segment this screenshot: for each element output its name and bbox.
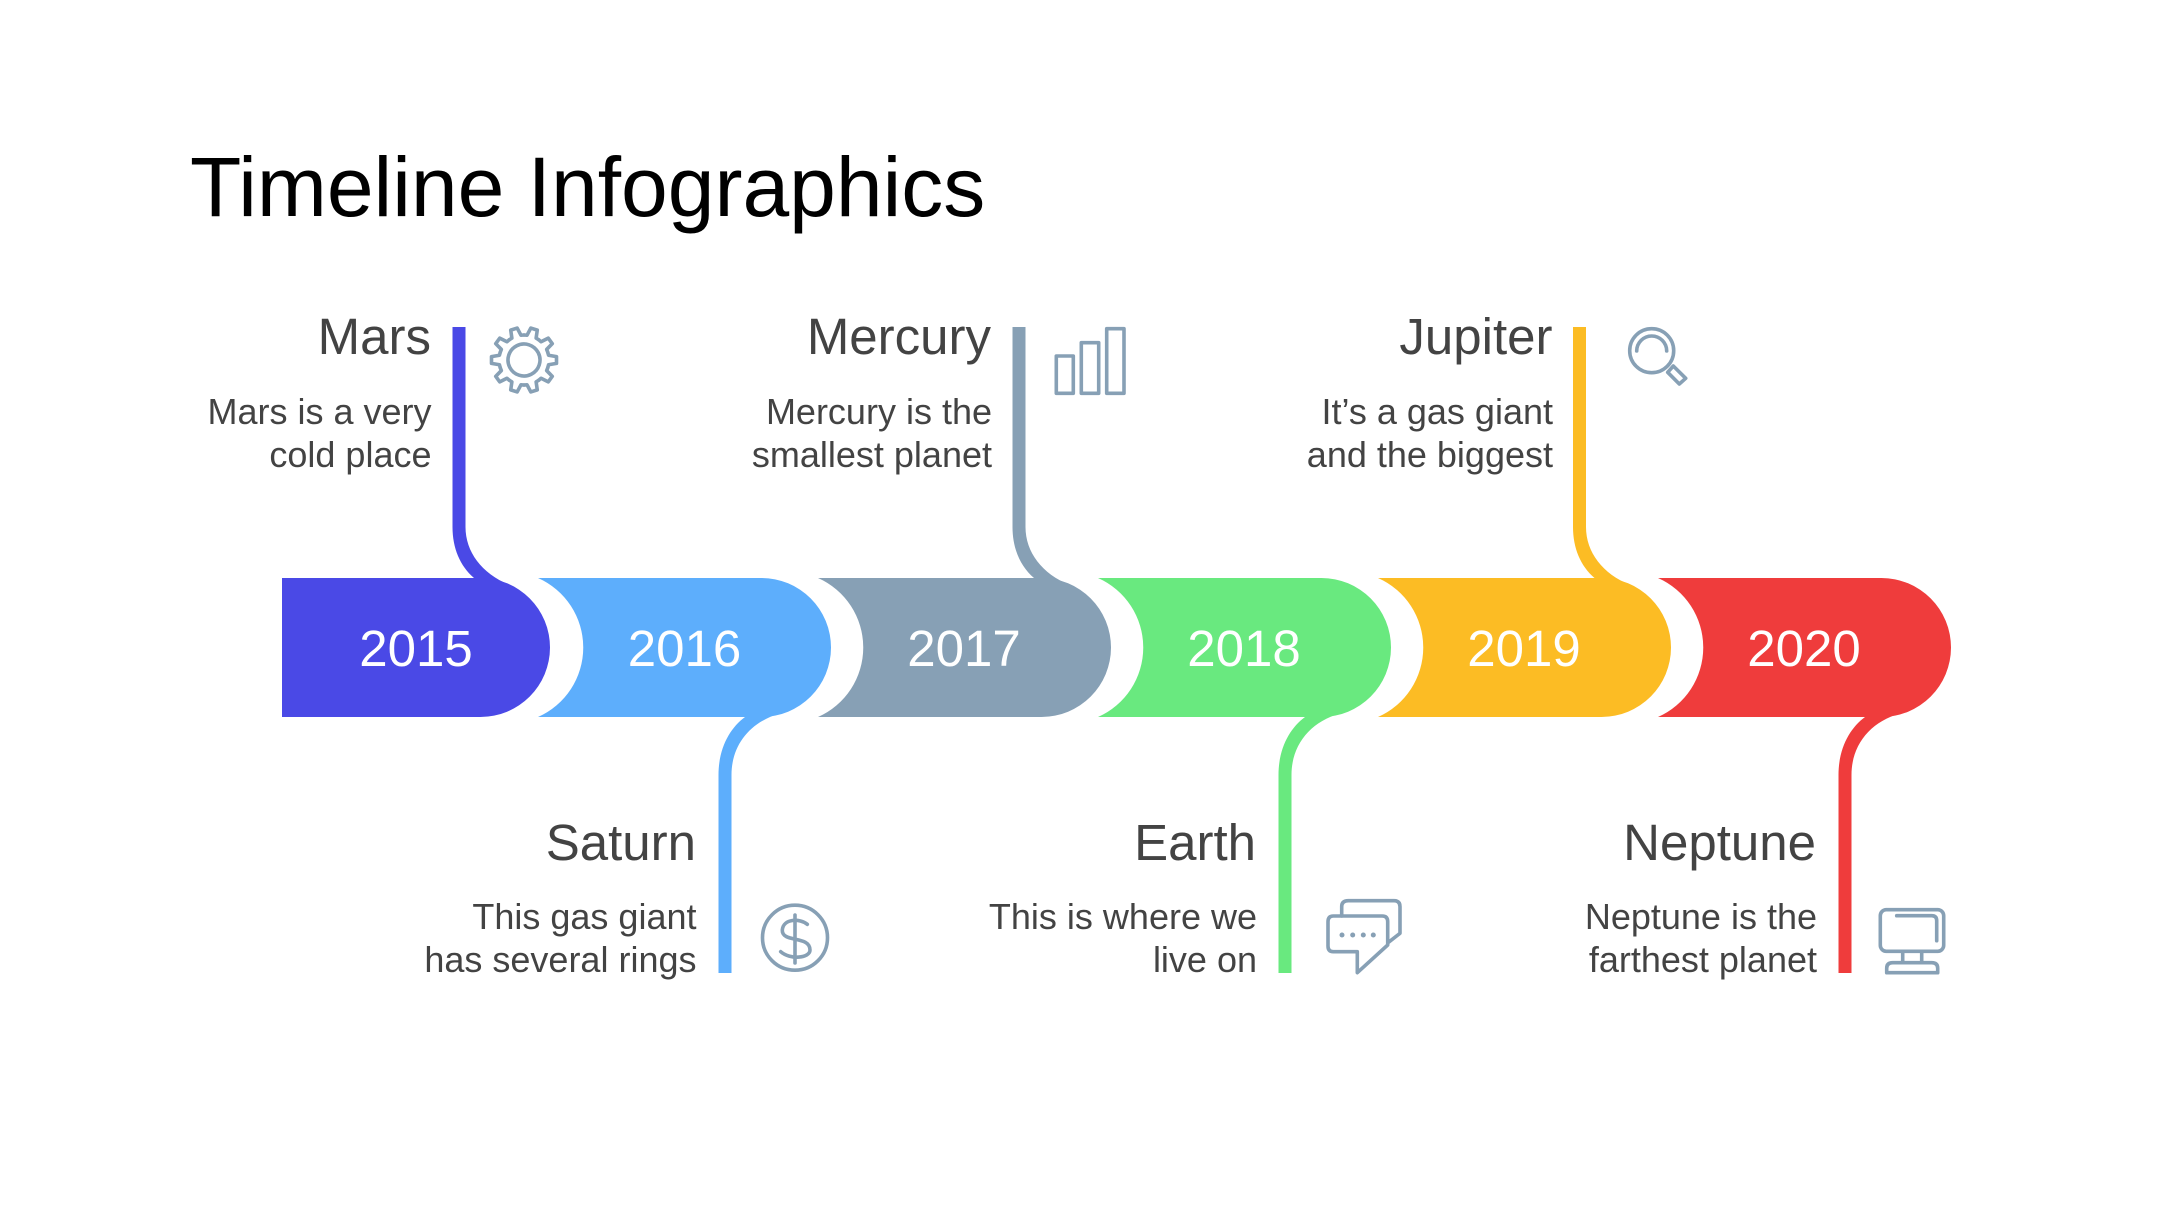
connector line: Mars xyxy=(452,327,510,590)
panel: 2020 Neptune xyxy=(1585,578,1951,980)
text: Jupiter description: It’s a gas giant xyxy=(1322,391,1553,432)
panel: 2017 Mercury xyxy=(752,308,1124,717)
timeline segment: 2019 xyxy=(1378,578,1671,717)
panel: 2016 Saturn xyxy=(424,578,831,980)
year: 2016: 2016 xyxy=(628,620,741,677)
text: Saturn description: This gas giant xyxy=(472,896,696,937)
text: Earth description: live on xyxy=(1153,939,1257,980)
icon: chat bubbles xyxy=(1328,901,1400,973)
text: Earth description: This is where we xyxy=(989,896,1257,937)
timeline segment: 2016 xyxy=(538,578,831,717)
icon: magnifying glass xyxy=(1630,329,1686,384)
heading: Jupiter: Jupiter xyxy=(1399,308,1553,365)
timeline segment: 2015 xyxy=(282,578,550,717)
icon: dollar coin xyxy=(762,905,828,970)
text: Saturn description: has several rings xyxy=(424,939,696,980)
timeline segment: 2018 xyxy=(1098,578,1391,717)
year: 2019: 2019 xyxy=(1467,620,1581,677)
heading: Saturn: Saturn xyxy=(546,814,696,871)
icon: desktop monitor xyxy=(1880,910,1944,973)
heading: Mars: Mars xyxy=(318,308,431,365)
icon: gear xyxy=(482,319,566,401)
timeline segment: 2020 xyxy=(1658,578,1951,717)
connector line: Mercury xyxy=(1012,327,1070,590)
icon: bar chart xyxy=(1056,329,1124,393)
title: Timeline Infographics xyxy=(190,140,985,234)
connector line: Earth xyxy=(1278,705,1340,973)
connector line: Jupiter xyxy=(1573,327,1630,590)
text: Neptune description: farthest planet xyxy=(1589,939,1817,980)
panel: 2018 Earth xyxy=(989,578,1400,980)
text: Mars description: Mars is a very xyxy=(207,391,432,432)
year: 2018: 2018 xyxy=(1187,620,1301,677)
connector line: Neptune xyxy=(1838,705,1900,973)
text: Mars description: cold place xyxy=(269,434,432,475)
heading: Earth: Earth xyxy=(1134,814,1256,871)
text: Jupiter description: and the biggest xyxy=(1307,434,1553,475)
panel: 2019 Jupiter xyxy=(1307,308,1686,717)
panel: 2015 Mars xyxy=(207,308,566,717)
year: 2020: 2020 xyxy=(1747,620,1861,677)
text: Mercury description: Mercury is the xyxy=(766,391,992,432)
heading: Neptune: Neptune xyxy=(1623,814,1816,871)
text: Mercury description: smallest planet xyxy=(752,434,992,475)
year: 2015: 2015 xyxy=(359,620,473,677)
timeline segment: 2017 xyxy=(818,578,1111,717)
heading: Mercury: Mercury xyxy=(807,308,991,365)
connector line: Saturn xyxy=(718,705,780,973)
text: Neptune description: Neptune is the xyxy=(1585,896,1817,937)
year: 2017: 2017 xyxy=(907,620,1021,677)
